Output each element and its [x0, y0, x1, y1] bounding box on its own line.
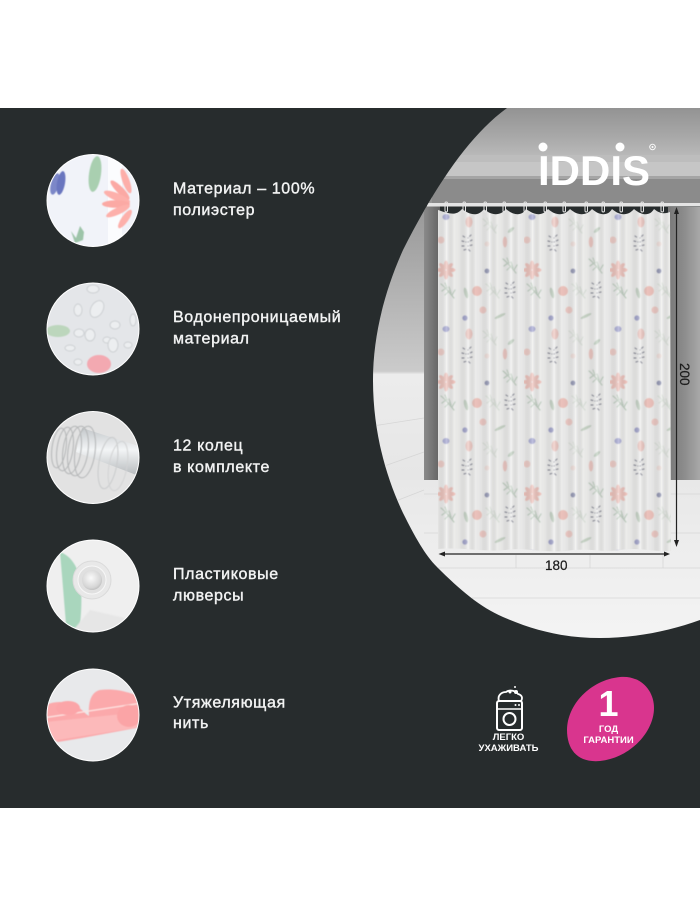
dark background panel [0, 108, 700, 808]
warranty text: 1 [598, 683, 619, 724]
label: Пластиковые [173, 566, 279, 583]
warranty text: ГОД [599, 724, 618, 735]
dimension arrow: width 180 [438, 552, 670, 573]
label [173, 180, 315, 219]
label: Водонепроницаемый [173, 309, 341, 326]
label [479, 732, 539, 754]
curtain [436, 205, 674, 555]
feature: material [45, 152, 315, 248]
label: материал [173, 330, 250, 348]
label [173, 566, 279, 604]
curtain rings [445, 202, 664, 212]
warranty text [583, 683, 634, 746]
badge: easy care [479, 686, 539, 754]
label: Утяжеляющая [173, 694, 286, 712]
label [173, 309, 341, 348]
room walls [370, 108, 700, 640]
dimension arrow: height 200: 200 [677, 363, 692, 386]
dimension arrow: width 180: 180 [545, 558, 568, 573]
label [173, 438, 270, 476]
label: 12 колец [173, 438, 243, 454]
icon: washing machine [497, 686, 522, 730]
thumbnail: rod with rings [45, 410, 145, 506]
dimension arrow: height 200 [674, 207, 692, 547]
warranty text: ГАРАНТИИ [583, 735, 634, 746]
label: УХАЖИВАТЬ [479, 743, 539, 754]
badge: 1 year warranty [567, 677, 654, 761]
thumbnail: water drops [45, 281, 141, 377]
label: ЛЕГКО [493, 732, 524, 743]
thumbnail: plastic grommet [45, 538, 141, 634]
pink blob [567, 677, 654, 761]
label: нить [173, 715, 209, 732]
shower rod [427, 203, 700, 206]
label [173, 694, 286, 732]
label: люверсы [173, 588, 244, 604]
thumbnail: hem with weight thread [45, 667, 142, 763]
feature: grommets [45, 538, 279, 634]
feature: weighted thread [45, 667, 286, 763]
thumbnail: fabric with flowers [45, 152, 141, 248]
label: Материал – 100% [173, 180, 315, 198]
bathroom photo with curtain [370, 108, 700, 640]
logo: IDDIS: IDDIS [538, 147, 650, 194]
feature: waterproof [45, 281, 341, 377]
label: полиэстер [173, 202, 255, 219]
feature: rings [45, 410, 270, 506]
label: в комплекте [173, 459, 270, 476]
